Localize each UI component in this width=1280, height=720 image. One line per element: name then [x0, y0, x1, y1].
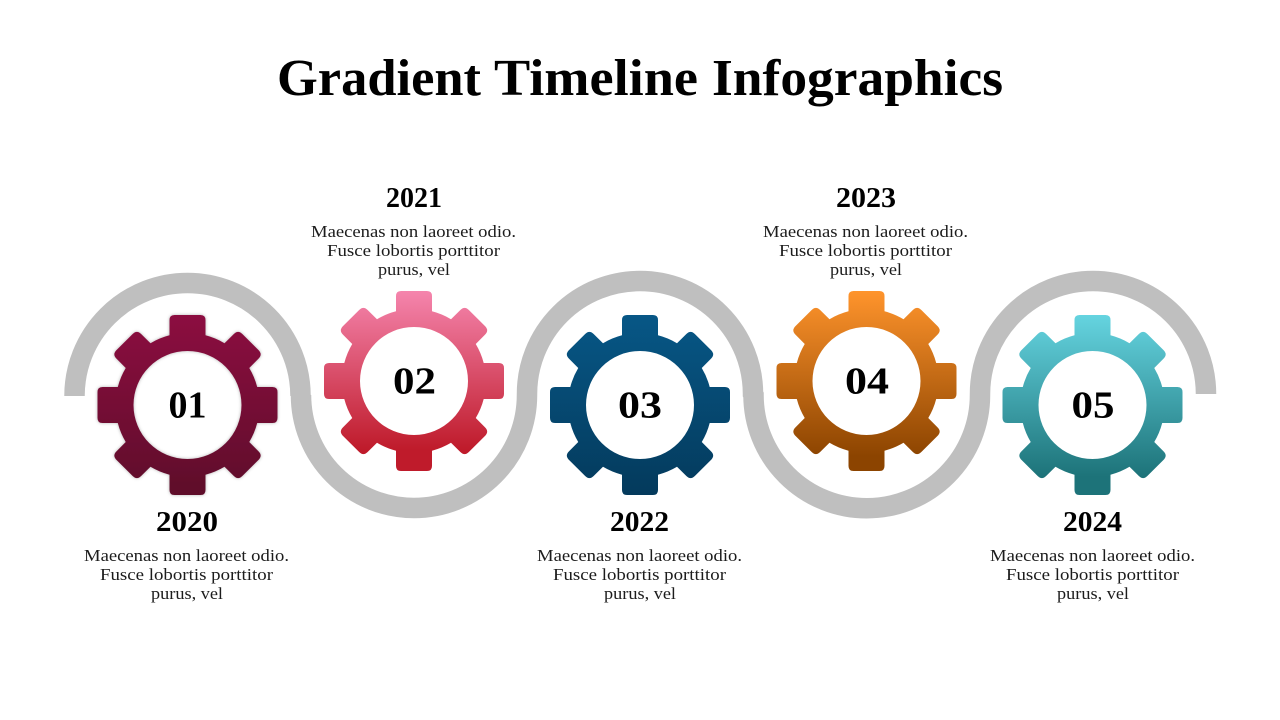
- icon: gear 03: [550, 315, 730, 495]
- number 01: 01: [168, 384, 206, 426]
- icon: gear 02: [324, 291, 504, 471]
- title: Infographics: [712, 50, 1003, 107]
- description 2022: [537, 546, 742, 603]
- description 2022: Maecenas non laoreet odio.: [537, 546, 742, 565]
- icon: gear 05: [1002, 315, 1182, 495]
- year 2020: 2020: [156, 507, 218, 538]
- description 2024: Fusce lobortis porttitor: [1006, 565, 1179, 584]
- milestone 2023: [763, 183, 968, 471]
- milestone 2021: [311, 183, 516, 471]
- description 2020: Maecenas non laoreet odio.: [84, 546, 289, 565]
- number 03: 03: [618, 384, 662, 426]
- icon: gear 01: [98, 315, 278, 495]
- title: Gradient: [277, 50, 482, 107]
- description 2023: Maecenas non laoreet odio.: [763, 222, 968, 241]
- number 04: 04: [845, 360, 889, 402]
- description 2020: purus, vel: [151, 584, 223, 603]
- description 2021: Fusce lobortis porttitor: [327, 241, 500, 260]
- grey wave track: [74, 281, 1206, 508]
- description 2024: purus, vel: [1057, 584, 1129, 603]
- description 2023: purus, vel: [830, 260, 902, 279]
- description 2022: purus, vel: [604, 584, 676, 603]
- description 2024: Maecenas non laoreet odio.: [990, 546, 1195, 565]
- description 2020: Fusce lobortis porttitor: [100, 565, 273, 584]
- year 2021: 2021: [386, 183, 442, 214]
- icon: gear 04: [776, 291, 956, 471]
- year 2023: 2023: [836, 183, 896, 214]
- year 2022: 2022: [610, 507, 669, 538]
- number 02: 02: [393, 360, 436, 402]
- milestone 2020: [84, 315, 289, 603]
- description 2021: [311, 222, 516, 279]
- year 2024: 2024: [1063, 507, 1122, 538]
- description 2020: [84, 546, 289, 603]
- description 2022: Fusce lobortis porttitor: [553, 565, 726, 584]
- milestone 2024: [990, 315, 1195, 603]
- milestone 2022: [537, 315, 742, 603]
- description 2021: purus, vel: [378, 260, 450, 279]
- number 05: 05: [1072, 384, 1114, 426]
- title: Timeline: [494, 50, 698, 107]
- description 2024: [990, 546, 1195, 603]
- description 2023: [763, 222, 968, 279]
- description 2021: Maecenas non laoreet odio.: [311, 222, 516, 241]
- description 2023: Fusce lobortis porttitor: [779, 241, 952, 260]
